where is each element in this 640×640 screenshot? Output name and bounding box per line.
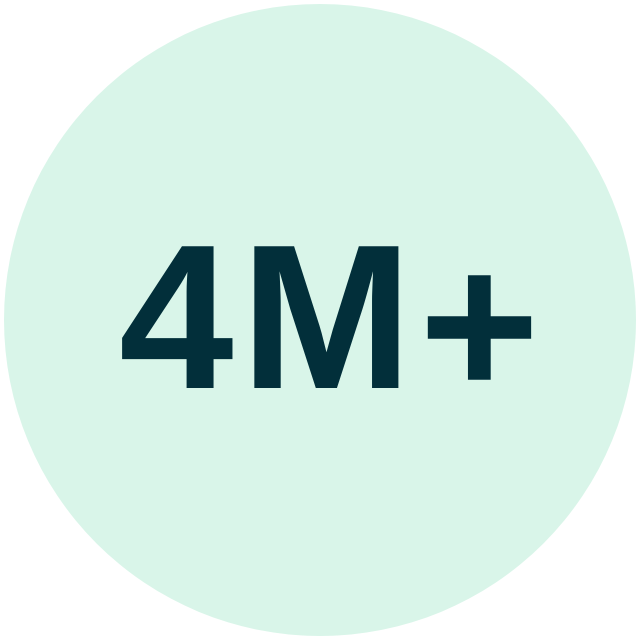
stat number: 4M	[119, 202, 419, 432]
stat number: +	[419, 210, 546, 440]
